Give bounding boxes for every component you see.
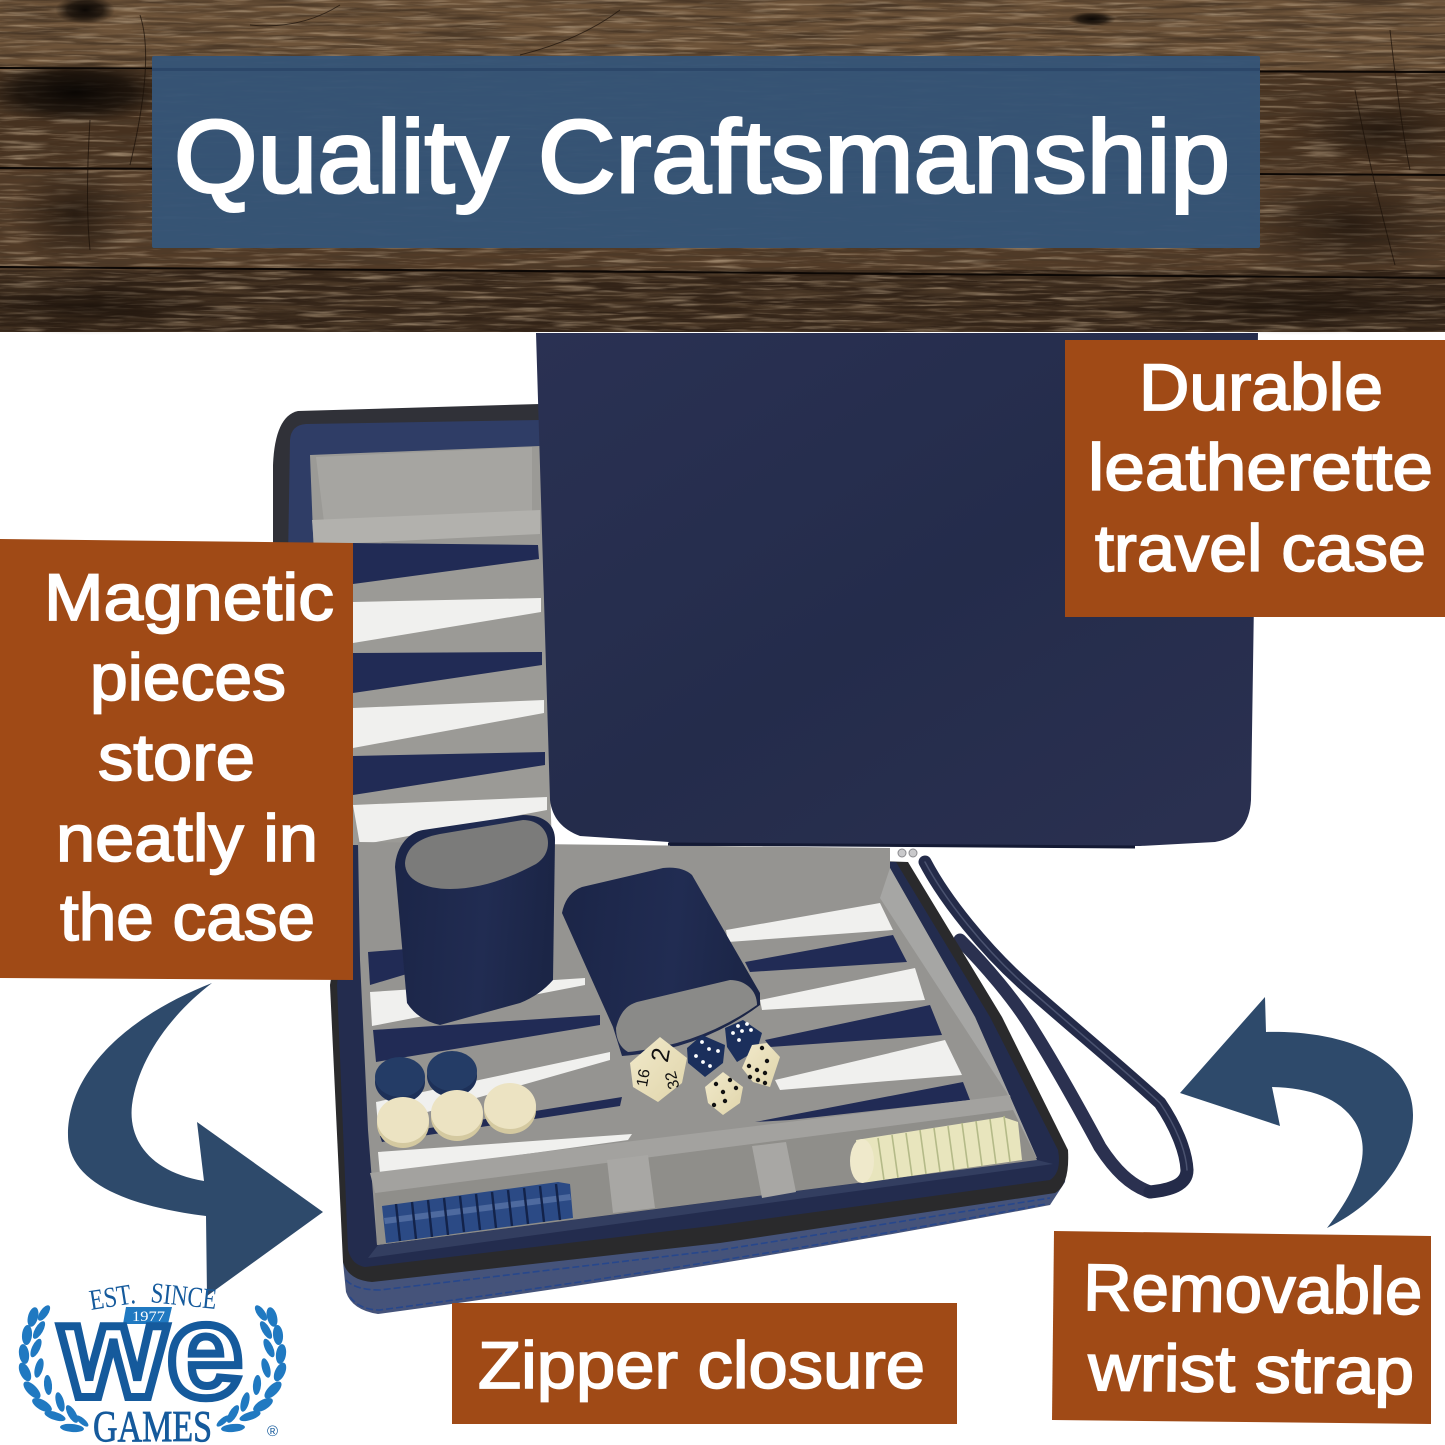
lower half: shell stitching [346, 1198, 1050, 1310]
callout: zipper closure: Zipper closure [478, 1328, 925, 1402]
doubling cube [630, 1037, 687, 1102]
callout: removable wrist strap: wrist strap [1087, 1330, 1415, 1408]
upper half: zipper and frame [273, 404, 540, 560]
callout: durable leatherette travel case: leatherette [1088, 430, 1433, 504]
callout: zipper closure [452, 1303, 957, 1424]
doubling cube: 2 [646, 1046, 676, 1064]
title banner [152, 56, 1260, 248]
callout: durable leatherette travel case: Durable [1139, 350, 1383, 424]
navy checker stack [382, 1182, 573, 1243]
logo year ribbon: 1977 [132, 1309, 166, 1325]
logo registered mark: ® [267, 1423, 278, 1440]
logo WE wordmark: we [59, 1277, 243, 1426]
doubling cube: 16 [634, 1068, 654, 1088]
wrist strap [925, 862, 1187, 1192]
logo laurels [16, 1303, 289, 1433]
callout: magnetic pieces: Magnetic [44, 560, 334, 634]
loose ivory checkers [377, 1083, 536, 1148]
logo established text: SINCE [149, 1277, 218, 1316]
lower half: felt ridge [370, 1095, 1013, 1193]
callout: magnetic pieces: store [98, 720, 255, 794]
lower half: felt board [358, 842, 1037, 1245]
lower half: navy frame [337, 845, 1059, 1267]
title banner: Quality Craftsmanship [174, 99, 1230, 214]
arrow: right, pointing to strap [1180, 997, 1413, 1228]
lower half: points left [368, 948, 632, 1174]
upright dice cup [395, 815, 555, 1025]
lower half: compartment dividers [607, 1155, 655, 1213]
lower half: leather shell [343, 1170, 1066, 1314]
logo established text: EST. [87, 1278, 138, 1317]
callout: durable leatherette travel case: travel case [1095, 511, 1426, 585]
callout: magnetic pieces: pieces [90, 640, 286, 714]
callout: removable wrist strap [1052, 1231, 1431, 1424]
ivory checker stack [850, 1116, 1022, 1183]
lower half: storage compartment floor [375, 1110, 1037, 1245]
lower half: points right [726, 903, 970, 1122]
logo established text [87, 1277, 218, 1317]
tipped dice cup [562, 868, 760, 1056]
leatherette lid [536, 333, 1258, 847]
logo year ribbon [123, 1307, 172, 1325]
arrow: left, pointing to zipper [68, 983, 323, 1296]
upper half: felt board and storage tray [310, 446, 552, 860]
loose navy checkers [375, 1051, 477, 1103]
lower half: zipper [330, 845, 1068, 1282]
callout: durable leatherette travel case [1065, 340, 1445, 617]
callout: magnetic pieces: the case [60, 880, 315, 954]
upper half: board points [353, 543, 547, 845]
doubling cube: 32 [662, 1069, 684, 1091]
wood header background [0, 0, 1445, 335]
callout: magnetic pieces: neatly in [56, 801, 318, 875]
logo: WE Games [16, 1277, 289, 1445]
open travel case [273, 404, 1068, 1314]
strap clasp [898, 849, 917, 857]
callout: magnetic pieces [0, 539, 353, 980]
callout: removable wrist strap: Removable [1083, 1250, 1423, 1328]
blue dice [687, 1020, 762, 1077]
ivory dice [705, 1043, 780, 1115]
